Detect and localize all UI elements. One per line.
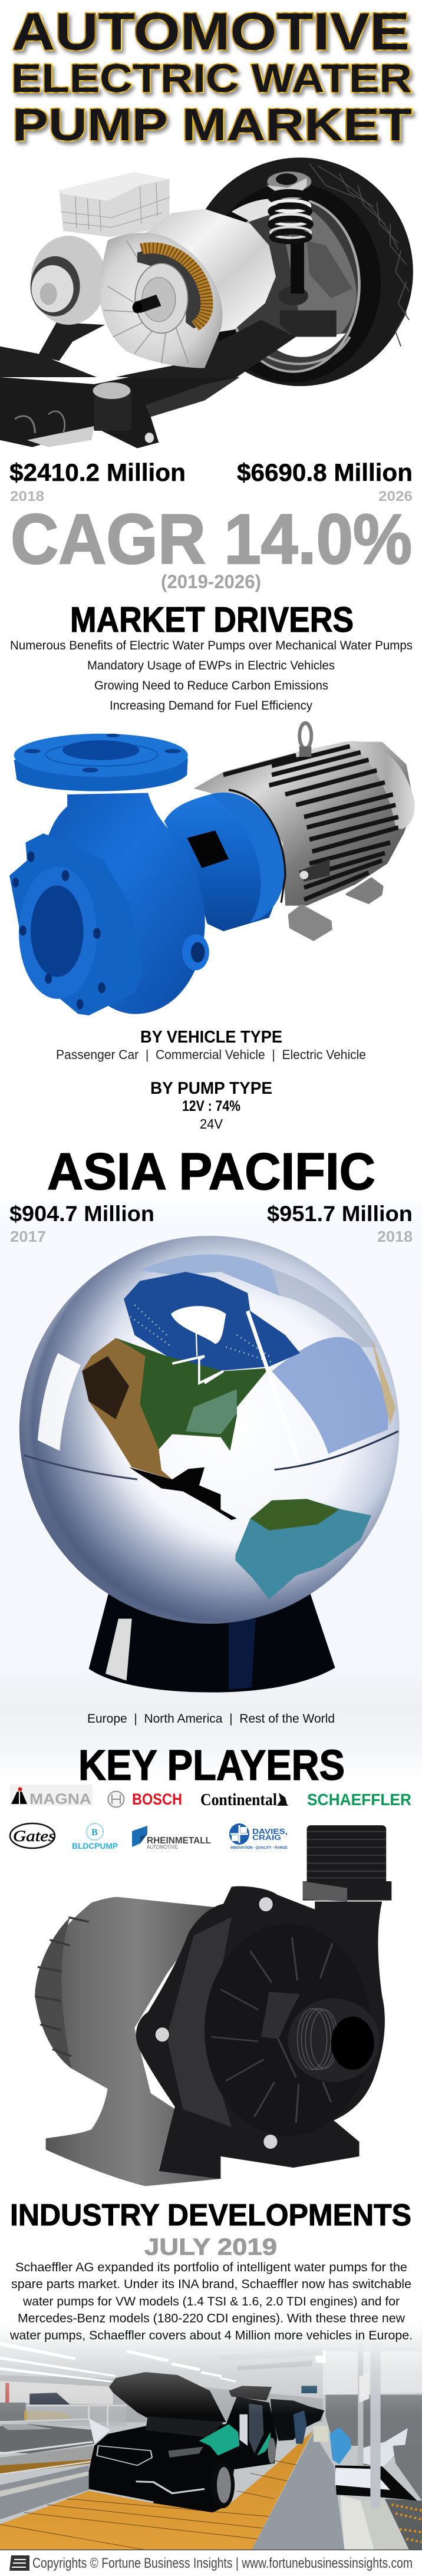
grey motor housing xyxy=(35,1897,220,2186)
land: south america xyxy=(236,1499,371,1599)
discharge flange xyxy=(14,734,188,791)
grey walkway xyxy=(252,2432,344,2550)
left floor xyxy=(0,2465,89,2519)
right shelving xyxy=(325,2340,422,2501)
logo: Bosch xyxy=(108,1790,182,1808)
factory ceiling and lights xyxy=(0,2341,422,2422)
stat: 2018 market size xyxy=(9,459,186,504)
coil spring and strut xyxy=(266,171,352,298)
market drivers list: Growing Need to Reduce Carbon Emissions xyxy=(94,678,328,692)
gear housing xyxy=(31,236,106,325)
land: africa edge xyxy=(371,1338,395,1425)
tray with documents xyxy=(335,2465,417,2501)
region list: Europe | North America | Rest of the World xyxy=(87,1712,335,1726)
teal body panel xyxy=(199,2424,239,2456)
subheading: date: JULY 2019 xyxy=(144,2234,277,2260)
land: central america xyxy=(129,1467,237,1520)
land: canada xyxy=(124,1272,300,1371)
heading: market drivers: MARKET DRIVERS xyxy=(70,600,354,639)
paragraph: development detail: water pumps, Schaeffler covers about 4 Million more vehicles in Europe. xyxy=(9,2328,413,2342)
paragraph: development detail xyxy=(9,2260,413,2342)
market drivers list: Increasing Demand for Fuel Efficiency xyxy=(110,698,312,713)
logo: Gates: Gates xyxy=(13,1828,55,1845)
outlet port xyxy=(331,2017,374,2070)
stat: 2018 market size: $2410.2 Million xyxy=(9,459,186,486)
drain port xyxy=(182,934,209,970)
electric motor xyxy=(194,723,415,941)
logo: Davies Craig xyxy=(229,1823,288,1850)
stat: 2017 Asia Pacific: $904.7 Million xyxy=(9,1202,154,1226)
market drivers list: Mandatory Usage of EWPs in Electric Vehicles xyxy=(87,658,335,672)
illustration: blue centrifugal pump xyxy=(9,723,415,1015)
title: ELECTRIC WATER xyxy=(11,56,412,101)
segment: by vehicle type: Passenger Car | Commercial Vehicle | Electric Vehicle xyxy=(56,1047,366,1062)
logo: Gates xyxy=(10,1823,55,1848)
market drivers list xyxy=(10,638,413,713)
paragraph: development detail: water pumps for VW models (1.4 TSI & 1.6, 2.0 TDI engines) and for xyxy=(22,2294,400,2308)
stat: 2026 market size: $6690.8 Million xyxy=(237,459,413,486)
title: PUMP MARKET xyxy=(12,100,412,150)
roller track xyxy=(385,2499,422,2550)
segment: by vehicle type: BY VEHICLE TYPE xyxy=(140,1028,282,1047)
controller box xyxy=(59,172,170,237)
cars in background xyxy=(229,2386,328,2444)
heading: key players: KEY PLAYERS xyxy=(78,1742,345,1789)
footer rule xyxy=(0,2549,422,2550)
stat: 2026 market size xyxy=(237,459,413,504)
title: AUTOMOTIVE xyxy=(12,2,410,61)
motor front cover xyxy=(99,233,223,368)
logo: BLDC Pump xyxy=(72,1823,118,1851)
CAGR headline: (2019-2026) xyxy=(161,571,261,592)
heading: industry developments: INDUSTRY DEVELOPMENTS xyxy=(10,2198,411,2232)
top fade xyxy=(0,2320,422,2415)
orange conveyor floor xyxy=(0,2430,314,2550)
heading: asia pacific: ASIA PACIFIC xyxy=(47,1142,375,1200)
title xyxy=(11,2,412,150)
icon: black globe stand xyxy=(89,1591,335,1693)
screws xyxy=(155,1897,278,2149)
atlantic tint xyxy=(272,1337,388,1454)
suspension arm xyxy=(0,286,337,377)
paragraph: development detail: Mercedes-Benz models (180-220 CDI engines). With these three new xyxy=(18,2311,405,2326)
black pump head xyxy=(136,1886,385,2179)
pump volute xyxy=(42,793,205,1014)
logo: Schaeffler: SCHAEFFLER xyxy=(307,1790,411,1809)
illustration: crystal globe xyxy=(19,1236,400,1624)
logo: Magna: MAGNA xyxy=(29,1791,91,1808)
left parts racks xyxy=(0,2403,127,2475)
logo: Rheinmetall Automotive xyxy=(132,1826,211,1850)
stat: 2026 market size: 2026 xyxy=(378,489,413,504)
motor shaft xyxy=(138,300,159,308)
segment: by pump type: 12V : 74% xyxy=(182,1098,240,1114)
main car xyxy=(89,2372,277,2512)
logo: Davies Craig: CRAIG xyxy=(252,1833,281,1842)
threaded outlet xyxy=(303,1825,391,1902)
suction flange xyxy=(9,833,143,1015)
motor drum xyxy=(134,209,276,337)
logo: Davies Craig: DAVIES, xyxy=(252,1828,288,1836)
bearing frame xyxy=(164,790,285,931)
illustration: electric motor and wheel assembly xyxy=(0,157,413,386)
paragraph: development detail: Schaeffler AG expanded its portfolio of intelligent water pumps for the xyxy=(15,2260,407,2274)
land: hudson bay xyxy=(171,1306,226,1344)
logo: Magna xyxy=(10,1785,93,1808)
steel column xyxy=(370,2340,381,2509)
stat: 2018 Asia Pacific xyxy=(267,1202,413,1245)
logo: BLDC Pump: BLDCPUMP xyxy=(72,1841,118,1851)
logo: Davies Craig: INNOVATION - QUALITY - RANGE xyxy=(230,1846,288,1850)
region panel background xyxy=(0,1196,422,1780)
logo: Rheinmetall Automotive: RHEINMETALL xyxy=(147,1836,211,1846)
market drivers list: Numerous Benefits of Electric Water Pumps over Mechanical Water Pumps xyxy=(10,638,413,652)
glass highlights xyxy=(38,1353,81,1451)
land: united states xyxy=(116,1338,269,1451)
segment: by pump type: BY PUMP TYPE xyxy=(150,1079,272,1098)
illustration: lower control arm xyxy=(0,377,239,448)
land: western north america xyxy=(82,1338,172,1479)
stat: 2017 Asia Pacific: 2017 xyxy=(10,1228,46,1245)
paragraph: development detail: spare parts market. Under its INA brand, Schaeffler now has switchable xyxy=(11,2277,411,2291)
segment: by vehicle type xyxy=(56,1028,366,1062)
segment: by pump type xyxy=(150,1079,272,1132)
stat: 2018 market size: 2018 xyxy=(10,489,44,504)
logo: Bosch: BOSCH xyxy=(132,1790,182,1808)
footer background xyxy=(0,2549,422,2576)
photo: vehicle assembly line xyxy=(0,2320,422,2550)
logo: Fortune Business Insights xyxy=(9,2555,29,2571)
wheel and tyre xyxy=(187,157,413,386)
stat: 2018 Asia Pacific: $951.7 Million xyxy=(267,1202,413,1226)
segment: by pump type: 24V xyxy=(200,1116,223,1132)
copper winding xyxy=(141,248,207,326)
stat: 2018 Asia Pacific: 2018 xyxy=(377,1228,413,1245)
logo: Rheinmetall Automotive: AUTOMOTIVE xyxy=(147,1844,178,1850)
logo: BLDC Pump: B xyxy=(91,1828,98,1838)
logo: Continental: Continental xyxy=(200,1790,277,1809)
blue plastic bag xyxy=(329,2427,351,2465)
illustration: black electric water pump xyxy=(35,1825,391,2186)
stat: 2017 Asia Pacific xyxy=(9,1202,154,1245)
